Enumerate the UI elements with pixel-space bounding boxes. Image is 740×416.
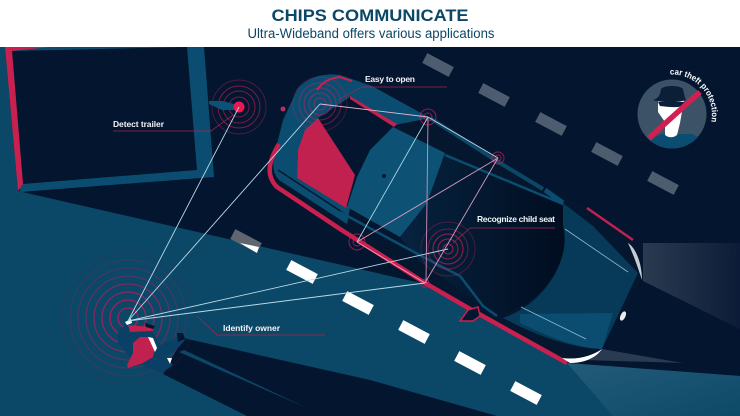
thief face xyxy=(658,100,684,137)
red collar xyxy=(128,325,153,332)
road dashes upper xyxy=(422,53,679,195)
upper headlight beam xyxy=(643,243,740,329)
small sensor rings xyxy=(349,109,504,287)
headlight lower xyxy=(562,349,602,363)
hood xyxy=(503,203,638,349)
label: Detect trailer xyxy=(113,115,233,131)
lower headlight beam xyxy=(583,349,683,363)
dark door line xyxy=(278,170,345,214)
hood teal highlight xyxy=(520,313,613,349)
windshield upper teal line xyxy=(445,155,563,204)
body and legs xyxy=(118,325,185,373)
label: Recognize child seat: Recognize child seat xyxy=(477,214,555,224)
right side red trim xyxy=(587,208,633,240)
label: Identify owner: Identify owner xyxy=(223,323,281,333)
header background xyxy=(0,0,740,47)
hood lines xyxy=(521,229,628,339)
signal rings: child seat xyxy=(421,222,475,276)
side strips upper xyxy=(430,118,543,189)
phone xyxy=(125,319,132,325)
mirror xyxy=(460,307,480,321)
rear teal band xyxy=(273,74,430,224)
rear top red accent xyxy=(317,77,352,90)
boot dark panel xyxy=(320,97,393,177)
signal rings: rear sensor xyxy=(293,77,347,131)
label: Recognize child seat xyxy=(453,214,555,243)
road dashes lower xyxy=(230,229,542,405)
connection lines between car sensors xyxy=(320,104,498,283)
label: Detect trailer: Detect trailer xyxy=(113,119,165,129)
icon: car theft protection xyxy=(638,70,718,148)
label: Identify owner xyxy=(197,316,325,335)
connection lines from owner xyxy=(128,104,448,321)
mirror sensor dot xyxy=(280,106,286,112)
thief hat xyxy=(653,86,686,102)
signal rings: owner xyxy=(62,252,194,384)
subtitle: Ultra-Wideband offers various applications xyxy=(248,26,495,41)
car xyxy=(267,74,643,363)
car body xyxy=(267,74,643,363)
label: Easy to open xyxy=(338,74,447,100)
red boot trim xyxy=(350,96,397,127)
foot xyxy=(177,333,185,342)
owner person xyxy=(118,319,185,373)
head xyxy=(145,323,155,329)
red rear window xyxy=(297,118,355,208)
signal rings: trailer sensor xyxy=(212,80,266,134)
white stripe xyxy=(148,337,157,352)
trailer xyxy=(5,47,214,192)
right side strip xyxy=(545,190,563,203)
thief shoulders xyxy=(651,133,698,148)
headlight upper xyxy=(628,243,642,280)
arc caption: car theft protection xyxy=(670,70,718,122)
red sill xyxy=(270,144,567,363)
trailer sensor xyxy=(209,101,244,112)
thief mask xyxy=(658,102,684,107)
prohibition stripe xyxy=(649,92,700,138)
sunroof dot xyxy=(382,174,386,178)
roof xyxy=(347,127,445,237)
white cuff xyxy=(167,358,172,364)
windshield xyxy=(400,153,565,316)
title: CHIPS COMMUNICATE xyxy=(272,7,468,25)
headlight beam on road xyxy=(567,363,740,416)
front oval light xyxy=(619,310,627,322)
owner shadow xyxy=(163,338,497,416)
red hood xyxy=(127,337,155,368)
door teal lines xyxy=(340,212,497,316)
label: Easy to open: Easy to open xyxy=(365,74,415,84)
